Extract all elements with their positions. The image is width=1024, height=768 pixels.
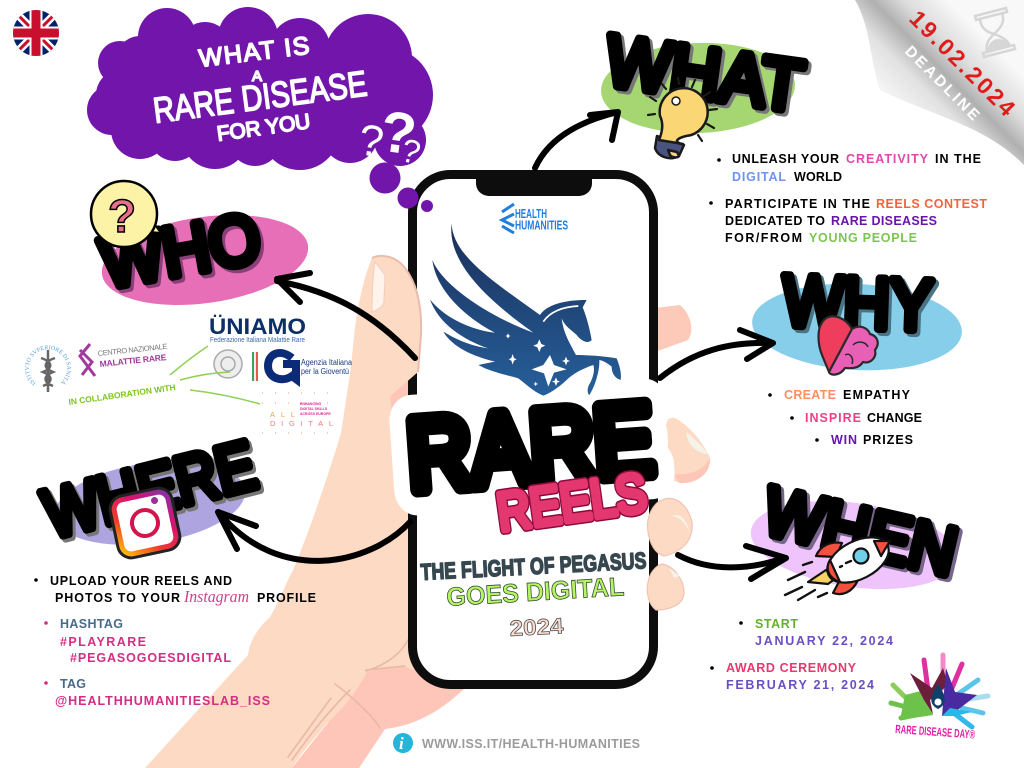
logo: all digital: ACROSS EUROPE [300,412,331,416]
cloud text: WHAT IS [197,32,311,73]
footer link: WWW.ISS.IT/HEALTH-HUMANITIES [422,737,640,751]
icon: lightbulb [648,78,717,158]
logo: emblem and agenzia giovani: per la Gioventù [301,367,349,376]
heading: when: WHEN [757,473,964,590]
heading: who: WHO [98,201,269,306]
cloud text: ? [356,115,387,167]
logo: all digital: ALL [270,410,295,419]
heading: where: WHERE [39,430,266,556]
text: when: AWARD CEREMONY [726,661,857,675]
text: when: FEBRUARY 21, 2024 [726,678,874,692]
rare halo: RARE [404,383,657,512]
text: where: UPLOAD YOUR REELS AND [50,574,232,588]
icon: question bubble: ? [108,190,136,242]
reels title: REELS [493,463,650,543]
in collaboration with: IN COLLABORATION WITH [68,382,176,407]
rare title: RARE [404,383,657,512]
finger 2 [650,418,710,483]
health humanities logo: HEALTH [515,206,547,221]
text: what: CREATIVITY [846,152,929,166]
icon: heart and brain [818,316,878,375]
text: where: TAG [60,677,86,691]
text: when [710,617,893,692]
cloud bubble dot [421,200,433,212]
in collaboration with [68,346,260,407]
logo: emblem and agenzia giovani [214,350,352,381]
hand [145,258,465,768]
heading: when: WHEN [760,476,967,593]
text: when: JANUARY 22, 2024 [755,634,893,648]
blob: who [96,203,314,317]
text: why: INSPIRE [805,411,861,425]
blob: why [750,279,964,375]
blob: where [49,450,251,556]
logo: rare disease day [891,655,988,742]
text: what: DIGITAL [732,170,786,184]
logo: centro nazionale malattie rare: CENTRO NAZIONALE [97,342,168,358]
text: why: EMPATHY [843,388,911,402]
text: what: IN THE [935,152,981,166]
text: what: DEDICATED TO [725,214,825,228]
text: where [34,574,316,708]
subtitle: goes digital: GOES DIGITAL [446,571,625,612]
logo: all digital: DIGITAL [270,419,333,428]
blob: when [745,489,963,601]
blob: what [599,40,797,136]
logo: uniamo: ÜNIAMO [209,314,306,339]
logo: emblem and agenzia giovani: Agenzia Italiana [301,358,352,367]
cloud text: RARE DISEASE [151,63,369,131]
cloud text: ? [376,99,420,168]
arrow: when [678,546,786,579]
cloud text: FOR YOU [215,110,312,146]
text: why: WIN [831,433,857,447]
finger 4 [647,564,684,610]
logo: centro nazionale malattie rare [80,342,168,376]
logo: rare disease day: RARE DISEASE DAY® [895,722,976,742]
arrow: who [277,273,415,358]
text: where: #PEGASOGOESDIGITAL [70,651,231,665]
subtitle: the flight of pegasus: THE FLIGHT OF PEGASUS [420,547,647,585]
deadline label: DEADLINE [901,43,982,124]
reels title: REELS [493,463,650,543]
text: why [768,388,922,447]
heading: who: WHO [95,198,266,303]
page curl [855,0,1024,165]
text: where: HASHTAG [60,617,123,631]
logo: centro nazionale malattie rare: MALATTIE RARE [99,352,167,369]
heading: why: WHY [784,264,937,349]
text: what: RARE DISEASES [831,214,937,228]
text: why: PRIZES [863,433,913,447]
footer link [393,733,640,753]
heading: what: WHAT [604,24,811,130]
icon: rocket [785,528,896,600]
cloud bubble small [398,188,418,208]
text: why: CHANGE [867,411,922,425]
cloud bubble [370,162,400,194]
text: where: PROFILE [257,591,316,605]
text: where: @HEALTHHUMANITIESLAB_ISS [55,694,270,708]
logo: all digital: ENHANCING [300,402,321,406]
phone [412,174,654,684]
footer link: i [399,734,404,753]
arrow: why [660,330,773,378]
heading: why: WHY [781,261,934,346]
cloud text: ? [397,131,424,172]
text: what: PARTICIPATE IN THE [725,197,870,211]
text: what: FOR/FROM [725,231,802,245]
icon: instagram [106,484,184,562]
cloud text: A [252,68,262,85]
text: where: #PLAYRARE [60,635,146,649]
finger behind phone [655,305,691,352]
pegasus logo [430,223,621,396]
icon: hourglass [975,8,1015,57]
health humanities logo: HUMANITIES [515,218,568,232]
deadline date: 19.02.2024 [904,5,1021,121]
finger 3 [648,498,692,556]
logo: all digital: DIGITAL SKILLS [300,407,328,411]
icon: question bubble [91,181,161,247]
logo: ISS: ISTITVTO SVPERIORE DI SANITÀ [25,345,71,386]
text: where: Instagram [183,587,249,606]
subtitle: 2024: 2024 [509,613,565,641]
arrow: where [218,512,410,561]
logo: all digital [262,393,340,433]
thought cloud [87,7,433,194]
text: why: CREATE [784,388,836,402]
heading: what: WHAT [601,21,808,127]
text: when: START [755,617,798,631]
flag [13,10,59,56]
text: where: PHOTOS TO YOUR [55,591,180,605]
text: what: YOUNG PEOPLE [809,231,917,245]
arrow: what [535,112,618,168]
heading: where: WHERE [36,427,263,553]
text: what: UNLEASH YOUR [732,152,839,166]
text: what: REELS CONTEST [876,197,987,211]
cloud text [151,32,424,172]
text: what: WORLD [794,170,842,184]
logo: uniamo: Federazione Italiana Malattie Rare [210,337,305,344]
health humanities logo [502,204,568,233]
thumb [340,256,421,440]
text: what [709,152,987,245]
